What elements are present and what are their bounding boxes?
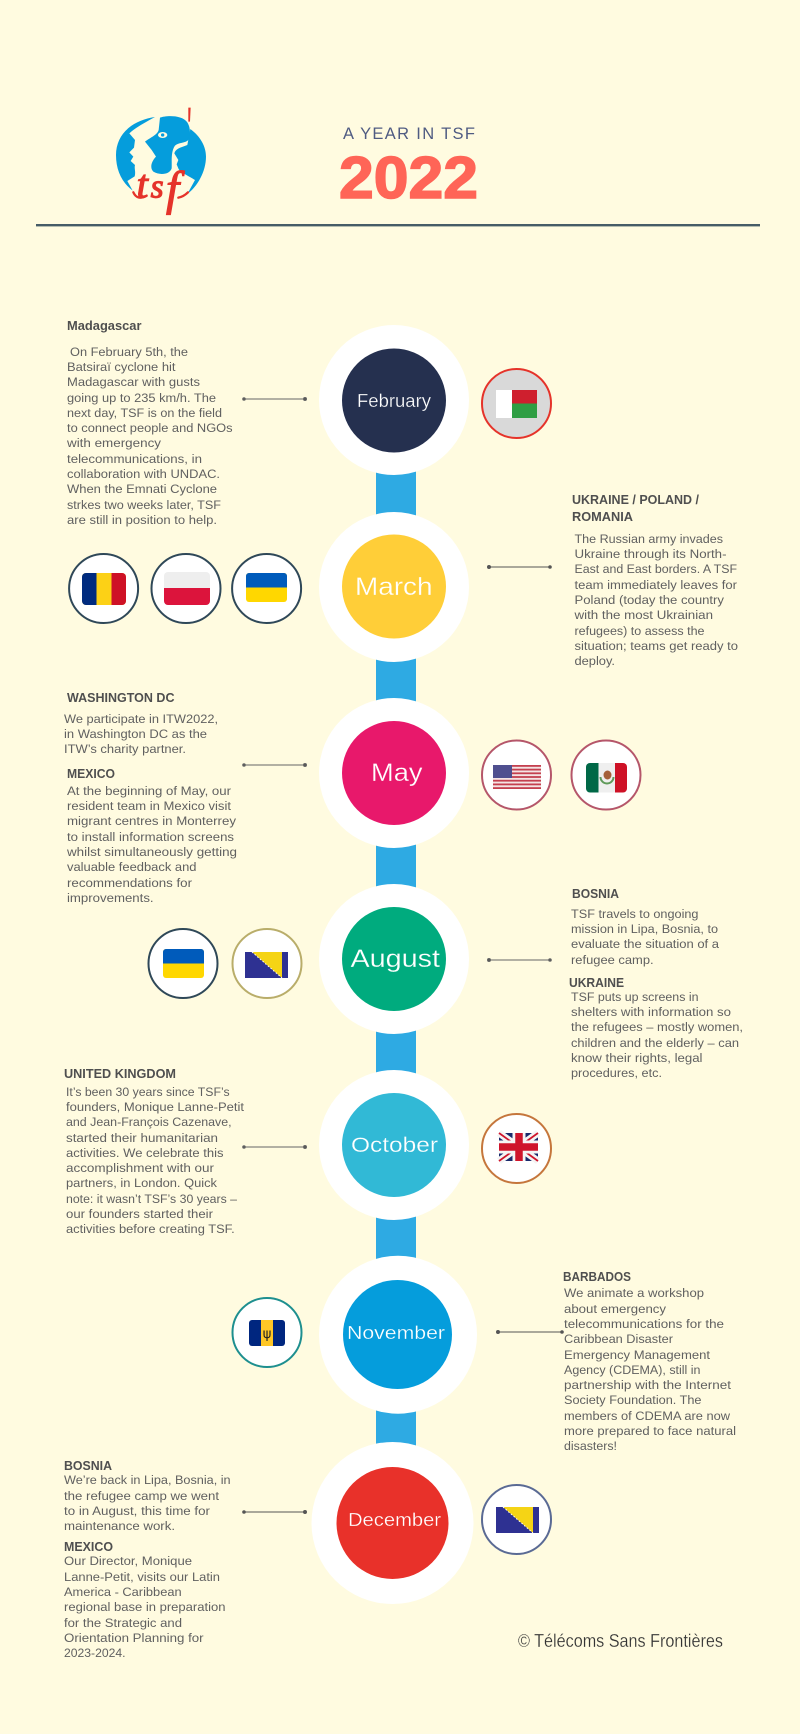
August text: UKRAINE	[569, 976, 624, 990]
August text: shelters with information so	[571, 1005, 731, 1019]
December text: regional base in preparation	[64, 1600, 226, 1614]
May text: recommendations for	[67, 876, 192, 890]
February text: When the Emnati Cyclone	[67, 482, 217, 496]
icon: Mexico flag	[572, 740, 640, 810]
March text: East and East borders. A TSF	[574, 562, 737, 576]
panel: December	[64, 1442, 551, 1660]
August text: evaluate the situation of a	[571, 937, 719, 951]
March text: refugees) to assess the	[574, 624, 705, 638]
November text: Emergency Management	[564, 1348, 711, 1362]
February text: Batsiraï cyclone hit	[67, 360, 176, 374]
December text: 2023-2024.	[64, 1646, 126, 1660]
August text: know their rights, legal	[571, 1051, 702, 1065]
icon: Bosnia flag	[232, 929, 302, 998]
March text: ROMANIA	[572, 510, 633, 524]
February connector arrow	[243, 398, 306, 400]
March connector arrow	[488, 566, 551, 568]
February text: telecommunications, in	[67, 452, 202, 466]
November text: partnership with the Internet	[564, 1378, 732, 1392]
October month circle: October	[351, 1133, 438, 1157]
November text: BARBADOS	[563, 1270, 631, 1284]
October text: It’s been 30 years since TSF’s	[66, 1085, 230, 1099]
May text	[64, 691, 237, 905]
December month circle	[312, 1442, 474, 1604]
December text: Orientation Planning for	[64, 1631, 204, 1645]
logo: TSF globe with faces: t	[137, 161, 150, 206]
timeline vertical bar	[376, 460, 416, 1460]
November text: Society Foundation. The	[564, 1393, 702, 1407]
October text	[64, 1067, 245, 1236]
header divider	[36, 224, 760, 226]
December text: We’re back in Lipa, Bosnia, in	[64, 1473, 231, 1487]
November text: We animate a workshop	[564, 1286, 704, 1300]
February text: Madagascar	[67, 319, 142, 333]
February text: to connect people and NGOs	[67, 421, 233, 435]
May text: to install information screens	[67, 830, 234, 844]
panel: February	[66, 319, 551, 527]
August text: refugee camp.	[571, 953, 654, 967]
August text: TSF travels to ongoing	[571, 907, 699, 921]
February text	[66, 319, 233, 527]
icon: Romania flag	[69, 554, 138, 623]
October text: founders, Monique Lanne-Petit	[66, 1100, 245, 1114]
logo: TSF globe with faces: s	[151, 168, 164, 205]
May text: ITW’s charity partner.	[64, 742, 186, 756]
panel: November	[232, 1256, 736, 1453]
November month circle	[319, 1256, 477, 1414]
May text: improvements.	[67, 891, 154, 905]
November text: Caribbean Disaster	[564, 1332, 673, 1346]
February month circle	[319, 325, 469, 475]
August text: children and the elderly – can	[571, 1036, 739, 1050]
December text: the refugee camp we went	[64, 1489, 220, 1503]
May text: We participate in ITW2022,	[64, 712, 218, 726]
August text	[569, 887, 743, 1080]
icon: Ukraine flag	[148, 929, 218, 998]
October text: accomplishment with our	[66, 1161, 214, 1175]
title: 2022: 2022	[339, 145, 478, 211]
August text: mission in Lipa, Bosnia, to	[571, 922, 718, 936]
August month circle: August	[350, 945, 440, 973]
May month circle	[319, 698, 469, 848]
title: A year in TSF: A YEAR IN TSF	[343, 125, 475, 143]
February month circle: February	[357, 391, 431, 411]
panel: October	[64, 1067, 551, 1236]
October text: UNITED KINGDOM	[64, 1067, 176, 1081]
May month circle: May	[371, 759, 423, 787]
March month circle	[319, 512, 469, 662]
March text: team immediately leaves for	[574, 578, 737, 592]
November month circle: November	[347, 1322, 445, 1343]
October text: our founders started their	[66, 1207, 213, 1221]
August text: TSF puts up screens in	[571, 990, 699, 1004]
August month circle	[319, 884, 469, 1034]
December text: maintenance work.	[64, 1519, 175, 1533]
icon: Madagascar flag	[482, 369, 551, 438]
May text: in Washington DC as the	[64, 727, 207, 741]
October text: activities before creating TSF.	[66, 1222, 235, 1236]
March text: with the most Ukrainian	[573, 608, 713, 622]
November text: about emergency	[564, 1302, 667, 1316]
November text: telecommunications for the	[564, 1317, 724, 1331]
December text: for the Strategic and	[64, 1616, 182, 1630]
March text: situation; teams get ready to	[574, 639, 738, 653]
March text: deploy.	[574, 654, 615, 668]
May text: WASHINGTON DC	[67, 691, 174, 705]
October text: started their humanitarian	[66, 1131, 218, 1145]
copyright footer: © Télécoms Sans Frontières	[518, 1630, 723, 1651]
logo: TSF globe with faces	[116, 108, 206, 215]
December text: BOSNIA	[64, 1459, 112, 1473]
February text: Madagascar with gusts	[67, 375, 200, 389]
October text: partners, in London. Quick	[66, 1176, 218, 1190]
August text: BOSNIA	[572, 887, 619, 901]
May text: whilst simultaneously getting	[66, 845, 237, 859]
December text: MEXICO	[64, 1540, 113, 1554]
November text: Agency (CDEMA), still in	[564, 1363, 701, 1377]
March month circle: March	[355, 573, 432, 601]
October month circle	[319, 1070, 469, 1220]
icon: Poland flag	[152, 554, 220, 623]
May text: migrant centres in Monterrey	[67, 814, 237, 828]
February text: collaboration with UNDAC.	[67, 467, 220, 481]
icon: Ukraine flag	[232, 554, 301, 623]
February text: next day, TSF is on the field	[67, 406, 222, 420]
icon: UK flag	[482, 1114, 551, 1183]
October text: and Jean-François Cazenave,	[66, 1115, 232, 1129]
December text	[64, 1459, 231, 1660]
December text: to in August, this time for	[64, 1504, 210, 1518]
February text: with emergency	[66, 436, 162, 450]
March text	[572, 493, 738, 668]
November text	[563, 1270, 736, 1453]
December text: Lanne-Petit, visits our Latin	[64, 1570, 220, 1584]
May text: MEXICO	[67, 767, 115, 781]
February text: strkes two weeks later, TSF	[67, 498, 221, 512]
December month circle: December	[348, 1510, 441, 1530]
March text: Ukraine through its North-	[574, 547, 726, 561]
October text: activities. We celebrate this	[66, 1146, 224, 1160]
March text: UKRAINE / POLAND /	[572, 493, 699, 507]
panel: August	[148, 884, 743, 1080]
August text: procedures, etc.	[571, 1066, 662, 1080]
May text: valuable feedback and	[67, 860, 197, 874]
May text: At the beginning of May, our	[67, 784, 231, 798]
October connector arrow	[243, 1146, 306, 1148]
February text: On February 5th, the	[70, 345, 188, 359]
panel: May	[64, 691, 640, 905]
August connector arrow	[488, 958, 551, 962]
August text: the refugees – mostly women,	[571, 1020, 743, 1034]
February text: are still in position to help.	[67, 513, 217, 527]
icon: Bosnia flag	[482, 1485, 551, 1554]
icon: Barbados flag: ψ	[263, 1327, 271, 1342]
May text: resident team in Mexico visit	[67, 799, 232, 813]
October text: note: it wasn’t TSF’s 30 years –	[66, 1192, 237, 1206]
March text: Poland (today the country	[574, 593, 725, 607]
December text: America - Caribbean	[64, 1585, 182, 1599]
panel: March	[69, 493, 738, 668]
icon: USA flag	[482, 740, 551, 810]
icon: Barbados flag	[232, 1298, 302, 1367]
May connector arrow	[243, 764, 306, 766]
December connector arrow	[243, 1510, 306, 1514]
November text: more prepared to face natural	[564, 1424, 736, 1438]
February text: going up to 235 km/h. The	[67, 391, 216, 405]
November connector arrow	[496, 1330, 563, 1334]
logo: TSF globe with faces: f	[166, 163, 185, 215]
March text: The Russian army invades	[574, 532, 723, 546]
November text: disasters!	[564, 1439, 617, 1453]
December text: Our Director, Monique	[64, 1554, 192, 1568]
November text: members of CDEMA are now	[564, 1409, 730, 1423]
